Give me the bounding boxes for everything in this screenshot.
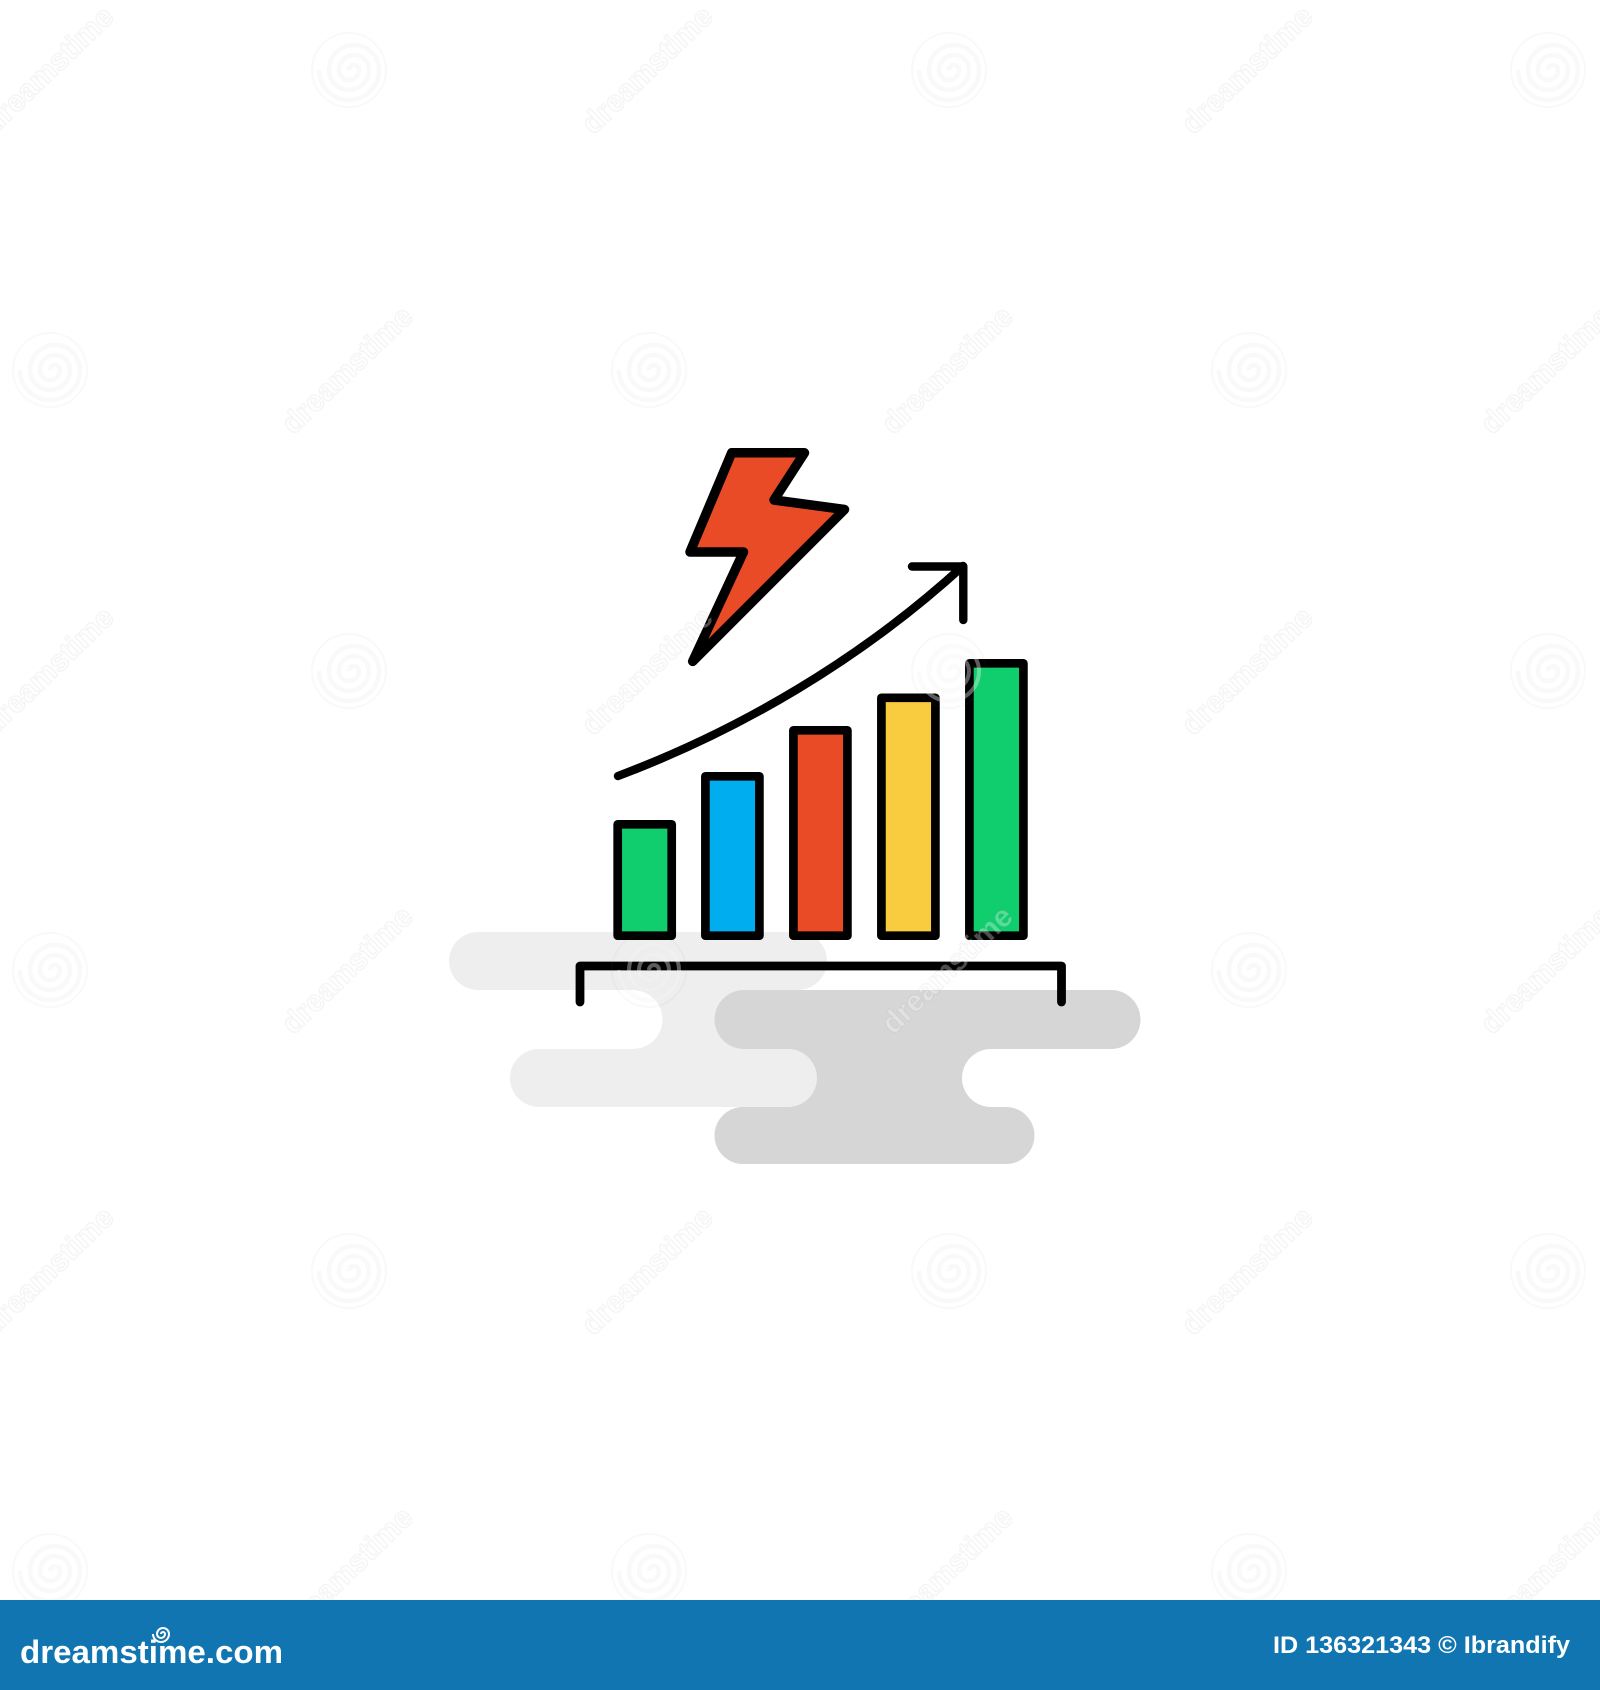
icon: lightning bolt (690, 453, 844, 661)
icon: logo swirl (153, 1628, 169, 1642)
watermark text: dreamstime (275, 900, 419, 1041)
bar 4: yellow (881, 698, 935, 936)
footer logo text: dreamstime.com (20, 1634, 283, 1670)
bar 5: green (969, 663, 1023, 936)
watermark text: dreamstime (275, 1501, 419, 1642)
bar 3: red (793, 730, 847, 936)
footer bar (0, 1600, 1600, 1690)
cloud: light grey (449, 932, 827, 1107)
arrow: growth trend (618, 566, 963, 776)
watermark text: dreamstime (575, 601, 719, 742)
watermark text: dreamstime (875, 300, 1019, 441)
watermark text: dreamstime (875, 900, 1019, 1041)
footer image id and credit: ID 136321343 © Ibrandify (1273, 1632, 1571, 1659)
watermark text: dreamstime (575, 0, 719, 141)
bar chart (618, 663, 1023, 936)
chart baseline bracket (580, 966, 1062, 1002)
cloud: light band in front (700, 1049, 817, 1107)
watermark text: dreamstime (575, 1201, 719, 1342)
cloud: dark grey (714, 990, 1140, 1164)
watermark text: dreamstime (1175, 0, 1319, 141)
bar 1: green (618, 824, 672, 936)
bar 2: blue (705, 776, 759, 936)
watermark text: dreamstime (1175, 1201, 1319, 1342)
watermark text: dreamstime (275, 300, 419, 441)
watermark text: dreamstime (1175, 601, 1319, 742)
watermark text: dreamstime (875, 1501, 1019, 1642)
